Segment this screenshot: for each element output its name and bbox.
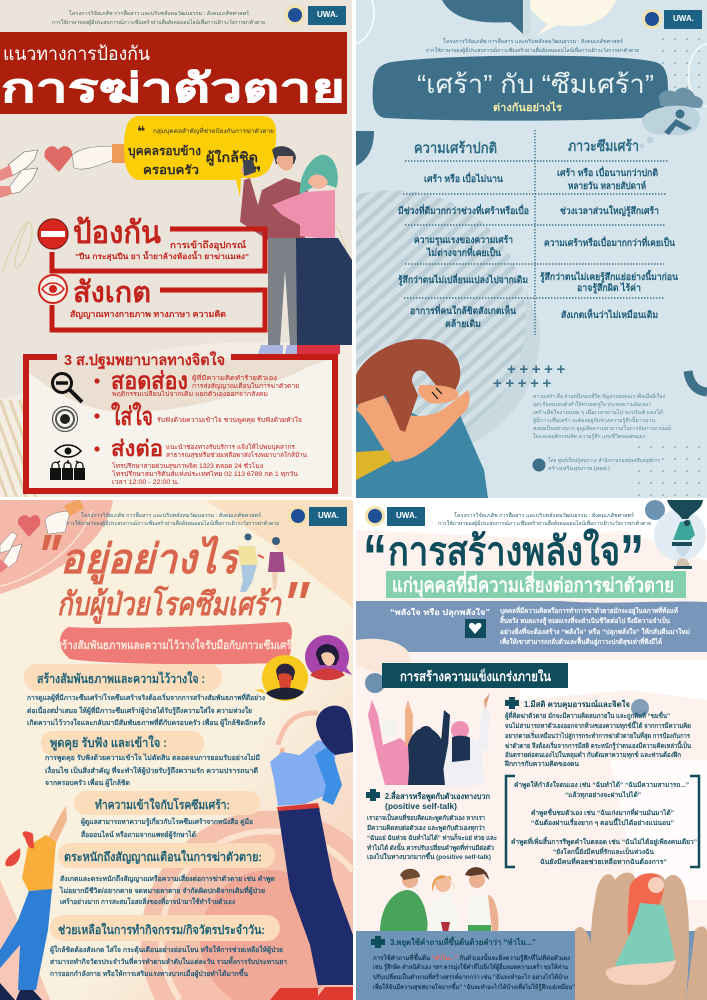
panel: sadness vs depression <box>356 0 707 498</box>
icon: heart <box>465 619 486 638</box>
item: refer: สาธารณสุขหรือช่วยเหลือพาส่งโรงพยาบาลใกล้บ้าน <box>166 451 308 459</box>
quote bracket panel: “ฉันต้องผ่านเรื่องยาก ๆ ตอนนี้ไปได้อย่างแน่นอน” <box>531 817 674 827</box>
subtitle blob <box>56 622 297 664</box>
icon: plus <box>505 697 519 709</box>
source note: ความเศร้า คือ ส่วนหนึ่งของชีวิต ปัญหาของคนเราคือเมื่อมีเรื่อง <box>533 393 665 400</box>
section: positive self-talk: 2.สื่อสารหรือพูดกับตัวเองทางบวก <box>385 790 490 802</box>
logos: UWA. <box>396 510 417 520</box>
header text: การใช้ภาษาของผู้มีประสบการณ์ภาวะซึมเศร้าผ่านสื่อสังคมออนไลน์เพื่อการเฝ้าระวังการฆ่าตัวตาย <box>52 18 265 26</box>
heading: observe: สังเกต <box>73 277 151 309</box>
section: understand depression: ผู้ดูแลสามารถหาความรู้เกี่ยวกับโรคซึมเศร้าจากหนังสือ คู่มือ <box>81 816 253 827</box>
section: daily routine: สามารถทำกิจวัตรประจำวันที่ควรทำตามลำดับในแต่ละวัน รวมทั้งการรับประทานยา <box>50 955 287 966</box>
section: stop asking why: การใช้คำถามที่ขึ้นต้น “ทำไม...” กับตัวเองนั้นจะยิ่งความรู้สึกที่ไม่ดีต่อตัวเอง <box>373 952 570 963</box>
section: mindfulness: ฝึกการกับความคิดของตน <box>504 760 579 768</box>
speech bubble: people close to you: ❝ <box>137 123 145 139</box>
decoration: gold stripes <box>0 400 48 497</box>
quote bracket panel: “แล้วทุกอย่างจะผ่านไปได้” <box>565 790 641 799</box>
decoration: gold scribbles <box>2 222 347 272</box>
left column rows: รู้สึกว่าตนไม่เปลี่ยนแปลงไปจากเดิม <box>398 272 528 287</box>
decoration: top right peach <box>205 500 353 608</box>
section: daily routine: ผู้ใกล้ชิดต้องสังเกต ใส่ใจ กระตุ้นเตือนอย่างอ่อนโยน หรือให้การช่วยเหลือให้ผู้ป่วย <box>50 945 283 955</box>
frame <box>52 290 265 330</box>
body <box>500 605 690 647</box>
decoration: striped circle <box>356 195 450 445</box>
panel: living with a depressed patient <box>0 500 353 1000</box>
speech bubble: people close to you: ผู้ใกล้ชิด <box>206 149 258 166</box>
right column rows: รู้สึกว่าตนไม่เคยรู้สึกแย่อย่างนี้มาก่อน <box>540 269 678 284</box>
section: warning signs: สังเกตและตระหนักถึงสัญญาณหรือความเสี่ยงต่อการฆ่าตัวตาย เช่น คำพูด <box>60 873 275 884</box>
source note: ผู้มีภาวะซึมเศร้า จะต้องอยู่กับช่วงความรู้สึกนี้ยาวนาน <box>533 416 655 424</box>
section: stop asking why: 3.หยุดใช้คำถามที่ขึ้นต้นด้วยคำว่า “ทำไม...” <box>390 936 536 948</box>
blue bottom band <box>356 931 707 1000</box>
quote bracket panel: คำพูดชื่นชมตัวเอง เช่น “ฉันเก่งมากที่ผ่านมันมาได้” <box>531 807 674 818</box>
section: stop asking why: เพื่อให้ฉันมีความสุขสบายใจมากขึ้น” “ฉันจะทำอะไรได้บ้างเพื่อไม่ให้รู้สึกแย่เหมือน” <box>373 981 575 992</box>
section: build trust <box>24 664 266 728</box>
blue intro band <box>356 601 707 652</box>
title blob <box>373 56 668 121</box>
decoration: outline circles <box>356 0 707 107</box>
quote bracket panel: ฉันยังมีคนที่คอยช่วยเหลือหากฉันต้องการ” <box>540 856 667 866</box>
observe details: สัญญาณทางกายภาพ ทางภาษา ความคิด <box>70 309 226 320</box>
section: positive self-talk: เองไปในทางบวกมากขึ้น (positive self-talk) <box>367 851 491 861</box>
body: อย่างยิ่งที่จะต้องสร้าง “พลังใจ” หรือ “ปลุกพลังใจ” ให้กลับคืนมาใหม่ <box>500 626 690 636</box>
right column rows: เศร้า หรือ เบื่อนานกว่าปกติ <box>557 165 658 179</box>
source note: ยุ่งๆ กับคนรอบตัวทำให้ท่านหดหู่ใจ ประสบความล้มเหลว <box>533 401 651 408</box>
right column rows: อาจรู้สึกผิด ไร้ค่า <box>577 282 641 295</box>
section: talk and listen <box>41 731 260 788</box>
section: warning signs: ไม่อยากมีชีวิต/อยากตาย จดหมายลาตาย จำกัดผิดปกติจากเดิมที่ผู้ป่วย <box>59 885 265 896</box>
heading: 3 ส.ปฐมพยาบาลทางจิตใจ <box>64 351 225 370</box>
illustration: hugging couple <box>240 146 352 354</box>
prevent section <box>38 215 265 271</box>
icon: hands with heart <box>0 500 84 572</box>
logos: UWA. <box>317 9 338 19</box>
speech bubble: people close to you: บุคคลรอบข้าง <box>128 144 201 159</box>
section: talk and listen: เงื่อนไข เป็นสิ่งสำคัญ ที่จะทำให้ผู้ป่วยรับรู้ถึงความรัก ความปรารถนาดี <box>45 765 258 776</box>
header text <box>66 512 279 527</box>
item: care: ใส่ใจ <box>111 401 153 431</box>
logos <box>288 506 347 526</box>
speech bubble: people close to you <box>124 116 276 197</box>
section: stop asking why <box>371 936 575 992</box>
table grid <box>403 130 669 335</box>
3S psychological first aid box <box>26 351 335 491</box>
title: “ <box>363 523 387 592</box>
section: mindfulness: ผู้ที่คิดฆ่าตัวตาย มักจะมีความคิดลบภายใน และถูกพิษที่ “ขมขื่น” <box>505 710 670 721</box>
plus signs: +++++ <box>507 361 569 378</box>
item: monitor: การส่งสัญญาณเตือนในการฆ่าตัวตาย <box>192 382 299 390</box>
prevent details: "ปืน กระสุนปืน ยา น้ำยาล้างห้องน้ำ ยาฆ่าแมลง" <box>75 250 249 261</box>
header text <box>426 38 639 54</box>
icon: thought cloud with sad person <box>640 88 703 148</box>
item: refer: โทรปรึกษาสายด่วนสุขภาพจิต 1323 ตลอด 24 ชั่วโมง <box>112 461 263 470</box>
section: positive self-talk: มีความคิดลบต่อตัวเอง และพูดกับตัวเองทุกว่า <box>367 824 485 833</box>
decoration: top left pink swoosh <box>0 500 113 594</box>
header text: การใช้ภาษาของผู้มีประสบการณ์ภาวะซึมเศร้าผ่านสื่อสังคมออนไลน์เพื่อการเฝ้าระวังการฆ่าตัวตาย <box>438 519 651 527</box>
decoration: dot grids <box>660 30 707 90</box>
section: build trust: สร้างสัมพันธภาพและความไว้วางใจ : <box>37 671 205 686</box>
illustration: couple dancing <box>238 534 285 592</box>
left column rows: มีช่วงที่ดีมากกว่าช่วงที่เศร้าหรือเบื่อ <box>398 203 529 217</box>
section: warning signs <box>58 843 275 906</box>
speech bubble: people close to you: ❞ <box>252 165 261 182</box>
section: mindfulness: จนไม่สามารถหาตัวเองออกจากห้วงของความทุกข์นี้ได้ จากการมีความคิด <box>505 720 691 730</box>
speech bubble: people close to you: ครอบครัว <box>143 163 199 177</box>
section: stop asking why: ปรับเปลี่ยนเป็นคำถามที่สร้างสรรค์มากกว่า เช่น “ฉันจะทำอะไร อย่างไรได้บ้าง <box>373 972 568 981</box>
item: care <box>94 401 302 431</box>
icon: eye and locks <box>50 445 85 480</box>
item: monitor: ผู้ที่มีความคิดทำร้ายตัวเอง <box>192 373 277 382</box>
title <box>57 535 283 624</box>
heading: “พลังใจ หรือ ปลุกพลังใจ” <box>390 607 490 618</box>
section banner: inner strength <box>365 663 568 693</box>
section: build trust: ต่อเนื่องสม่ำเสมอ ให้ผู้ที่มีภาวะซึมเศร้า/ผู้ป่วยได้รับรู้ถึงความใส่ใจ ความห่วงใย <box>27 705 252 716</box>
left column rows: ไม่ต่างจากที่เคยเป็น <box>426 245 501 259</box>
quote bracket panel: คำพูดให้กำลังใจตนเอง เช่น “ฉันทำได้” “ฉันมีความสามารถ...” <box>514 780 689 790</box>
decoration: bottom right rings <box>0 811 353 1000</box>
frame <box>52 229 265 271</box>
heading: prevent: ป้องกัน <box>73 215 161 250</box>
header text: การใช้ภาษาของผู้มีประสบการณ์ภาวะซึมเศร้าผ่านสื่อสังคมออนไลน์เพื่อการเฝ้าระวังการฆ่าตัวตาย <box>426 46 639 54</box>
title <box>363 523 644 592</box>
illustration: hands holding woman <box>575 872 707 1000</box>
avatar: man <box>255 655 308 701</box>
item: refer: โทรปรึกษาสมาริตันส์แห่งประเทศไทย 02 113 6789 กด 1 ทุกวัน <box>112 470 299 478</box>
left column rows: คล้ายเดิม <box>445 318 481 330</box>
title: อยู่อย่างไร <box>60 535 244 585</box>
decoration: teal wedge <box>356 131 374 166</box>
left column rows <box>398 171 529 330</box>
title: ” <box>620 523 644 592</box>
section: warning signs: ตระหนักถึงสัญญาณเตือนในการฆ่าตัวตาย: <box>64 849 262 864</box>
panel: building willpower <box>356 500 707 1000</box>
title blob: ต่างกันอย่างไร <box>493 101 562 114</box>
plus signs <box>493 361 569 392</box>
item: monitor: สอดส่อง <box>111 368 188 395</box>
section: daily routine: การออกกำลังกาย หรือให้การเสริมแรงทางบวกเมื่อผู้ป่วยทำได้มากขึ้น <box>50 967 248 979</box>
section: mindfulness: 1.มีสติ ควบคุมอารมณ์และจิตใจ <box>524 699 630 710</box>
illustration: person in hourglass <box>645 500 706 569</box>
header text: การใช้ภาษาของผู้มีประสบการณ์ภาวะซึมเศร้าผ่านสื่อสังคมออนไลน์เพื่อการเฝ้าระวังการฆ่าตัวตาย <box>66 519 279 527</box>
panel: suicide prevention <box>0 0 352 497</box>
section: understand depression: ทำความเข้าใจกับโรคซึมเศร้า: <box>95 797 230 812</box>
icon: no entry <box>38 219 68 249</box>
section: positive self-talk: เราอาจเป็นคนที่ชอบคิดและพูดกับตัวเอง หากเรา <box>367 812 485 823</box>
illustration: tall woman <box>270 706 353 1000</box>
section: talk and listen: พูดคุย รับฟัง และเข้าใจ : <box>50 735 167 751</box>
prevent details: การเข้าถึงอุปกรณ์ <box>170 239 247 251</box>
title banner <box>0 32 347 114</box>
source note <box>533 393 671 440</box>
left column rows: เศร้า หรือ เบื่อไม่นาน <box>424 171 503 185</box>
icon: plus <box>371 936 385 948</box>
icon: magnifier <box>52 374 82 402</box>
logos <box>642 9 702 29</box>
illustration: group raising hands <box>368 693 490 787</box>
source note: เศร้าเสียใจง่ายบ่อย ๆ เมื่อเวลาผ่านไป จะปรับตัวเองได้ <box>533 408 663 416</box>
header text: โครงการวิจัยเภสัช การสื่อสาร และบริบทสังคมวัฒนธรรม : สังคมเภสัชศาสตร์ <box>81 512 261 519</box>
item: refer: แนะนำช่องทางรับบริการ แจ้งให้ไปพบบุคลากร <box>166 443 296 451</box>
section: talk and listen: การพูดคุย รับฟังด้วยความเข้าใจ ไม่ตัดสิน ตลอดจนการยอมรับอย่างไม่มี <box>45 753 260 763</box>
header text: โครงการวิจัยเภสัช การสื่อสาร และบริบทสังคมวัฒนธรรม : สังคมเภสัชศาสตร์ <box>443 38 623 45</box>
logos: UWA. <box>673 13 694 23</box>
icon: eye <box>39 275 67 303</box>
left column rows: ความรุนแรงของความเศร้า <box>414 234 513 246</box>
quote mark: open <box>42 535 62 550</box>
item: monitor: พฤติกรรมเปลี่ยนไปจากเดิม แยกตัวเองออกจากสังคม <box>112 389 268 398</box>
decoration: white centre <box>356 500 707 560</box>
section: understand depression <box>74 791 260 840</box>
header text: โครงการวิจัยเภสัช การสื่อสาร และบริบทสังคมวัฒนธรรม : สังคมเภสัชศาสตร์ <box>454 512 634 519</box>
right column rows: หลายวัน หลายสัปดาห์ <box>568 180 646 192</box>
source note: ส่งผลเป็นอย่างมาก สูญเสียความสามารถในการจัดการอารมณ์ <box>533 424 671 432</box>
body: เพื่อให้เขาสามารถกลับตัวและฟื้นคืนสู่ภาวะปกติสุขเท่าที่พึงมีได้ <box>500 636 663 647</box>
plus signs: +++++ <box>493 375 555 392</box>
icon: listening target <box>52 406 78 432</box>
title: การสร้างพลังใจ <box>388 528 620 574</box>
illustration: girl pointing <box>0 806 67 1000</box>
subtitle blob: สร้างสัมพันธภาพและความไว้วางใจรับมือกับภาวะซึมเศร้า <box>56 638 297 652</box>
column heading: normal sadness: ความเศร้าปกติ <box>414 140 497 157</box>
illustration: three friends <box>380 867 498 932</box>
decoration: teal arc <box>688 371 707 392</box>
logos: UWA. <box>318 510 339 520</box>
left column rows: อาการที่คนใกล้ชิดสังเกตเห็น <box>410 303 516 317</box>
header text <box>438 512 651 527</box>
speech bubble: people close to you: กลุ่มบุคคลสำคัญที่ช่วยป้องกันการฆ่าตัวตาย <box>153 127 274 135</box>
section: daily routine: ช่วยเหลือในการทำกิจกรรม/กิจวัตรประจำวัน: <box>58 922 265 937</box>
logos <box>365 506 425 526</box>
item: refer: เวลา 12:00 - 22:00 น. <box>112 479 179 486</box>
section: positive self-talk: ทำไม่ได้ ดังนั้น ควรปรับเปลี่ยนคำพูดที่ท่านมีต่อตัว <box>367 842 494 853</box>
comparison table <box>398 130 678 335</box>
section: talk and listen: จากครอบครัว เพื่อน ผู้ใกล้ชิด <box>45 777 130 788</box>
source credit: สร้างเสริมสุขภาพ (สสส.) <box>548 465 610 472</box>
icon: giving hands with heart <box>0 144 126 198</box>
section: positive self-talk: “ฉันแย่ ฉันห่วย ฉันทำไม่ได้” ท่านก็จะแย่ ห่วย และ <box>367 833 497 842</box>
right column rows: สังเกตเห็นว่าไม่เหมือนเดิม <box>561 308 658 321</box>
section: stop asking why: เช่น รู้สึกผิด ตำหนิตัวเอง ฯลฯ ควรมุ่งใช้คำที่ไม่ยิ่งให้ผู้อื่นหมดความเศร้า ขอให้ท่าน <box>373 962 569 972</box>
source credit <box>532 457 660 472</box>
observe section <box>39 275 265 330</box>
speech bubbles <box>442 0 616 36</box>
title banner: แนวทางการป้องกัน <box>3 44 150 65</box>
section: understand depression: สื่อออนไลน์ หรือถามจากแพทย์ผู้รักษาได้ <box>81 829 196 840</box>
section: mindfulness <box>504 697 691 768</box>
column heading: depression: ภาวะซึมเศร้า <box>568 138 639 155</box>
section: build trust: เกิดความไว้วางใจและกลับมามีสัมพันธภาพที่ดีกับครอบครัว เพื่อน ผู้ใกล้ชิดอีกครั้ง <box>27 716 266 728</box>
prevent details <box>75 239 249 261</box>
title blob: “เศร้า” กับ “ซึมเศร้า” <box>417 69 654 99</box>
section: positive self-talk <box>366 789 497 861</box>
section: positive self-talk: (positive self-talk) <box>385 802 457 811</box>
source note: ใจและพฤติกรรมคิด ความรู้สึก แห่งชีวิตของตนเอง <box>533 433 645 440</box>
header text <box>52 10 265 26</box>
title: กับผู้ป่วยโรคซึมเศร้า <box>57 585 283 624</box>
item: refer: ส่งต่อ <box>111 436 163 461</box>
right column rows <box>540 165 678 321</box>
section: daily routine <box>50 915 287 979</box>
quote mark: close <box>288 582 310 598</box>
quote bracket panel <box>506 776 699 867</box>
section: build trust: การดูแลผู้ที่มีภาวะซึมเศร้า/โรคซึมเศร้าจริงต้องเริ่มจากการสร้างสัมพันธภาพที่ดีอย่าง <box>27 692 266 703</box>
item: care: รับฟังด้วยความเข้าใจ ชวนพูดคุย รับฟังด้วยหัวใจ <box>157 416 302 424</box>
right column rows: ความเศร้าหรือเบื่อมากกว่าที่เคยเป็น <box>544 235 675 249</box>
section banner: inner strength: การสร้างความแข็งแกร่งภายใน <box>400 667 551 684</box>
quote bracket panel: คำพูดที่เพิ่มสิ้นการรีพูดคำในตลอด เช่น “ฉันไม่ได้อยู่เพียงคนเดียว” <box>511 836 697 847</box>
decoration: cream blob <box>356 639 410 674</box>
avatar: woman <box>305 635 352 680</box>
right column rows: ช่วงเวลาส่วนใหญ่รู้สึกเศร้า <box>560 205 659 218</box>
title banner: การฆ่าตัวตาย <box>1 67 345 111</box>
header text: โครงการวิจัยเภสัช การสื่อสาร และบริบทสังคมวัฒนธรรม : สังคมเภสัชศาสตร์ <box>69 10 249 17</box>
body: สิ้นหวัง หมดแรงสู้ หมดแรงที่จะดำเนินชีวิตต่อไป จึงมีความจำเป็น <box>500 615 670 626</box>
item: refer <box>94 436 308 486</box>
section: warning signs: เศร้าอย่างมาก การสะสมโอสถสิ่งของที่อาจนำมาใช้ทำร้ายตัวเอง <box>60 896 236 906</box>
item: monitor <box>94 368 299 398</box>
quote bracket panel: “ยังโลกนี้ยังมีคนที่รักและเป็นห่วงฉัน <box>553 846 654 856</box>
section: mindfulness: อันตรายต่อตนเองไปในหลุมดำ กับตัณหาความทุกข์ และท่านต้องฝึก <box>505 750 681 759</box>
logos <box>285 5 346 25</box>
illustration: sad woman <box>356 339 488 498</box>
icon: plus <box>366 789 380 801</box>
source credit: โดย ศูนย์เรียนรู้สุขภาวะ สำนักงานกองทุนสนับสนุนการ <box>548 457 660 464</box>
body: บุคคลที่มีความคิดหรือการทำการฆ่าตัวตายมักจะอยู่ในสภาพที่ท้อแท้ <box>500 605 678 616</box>
